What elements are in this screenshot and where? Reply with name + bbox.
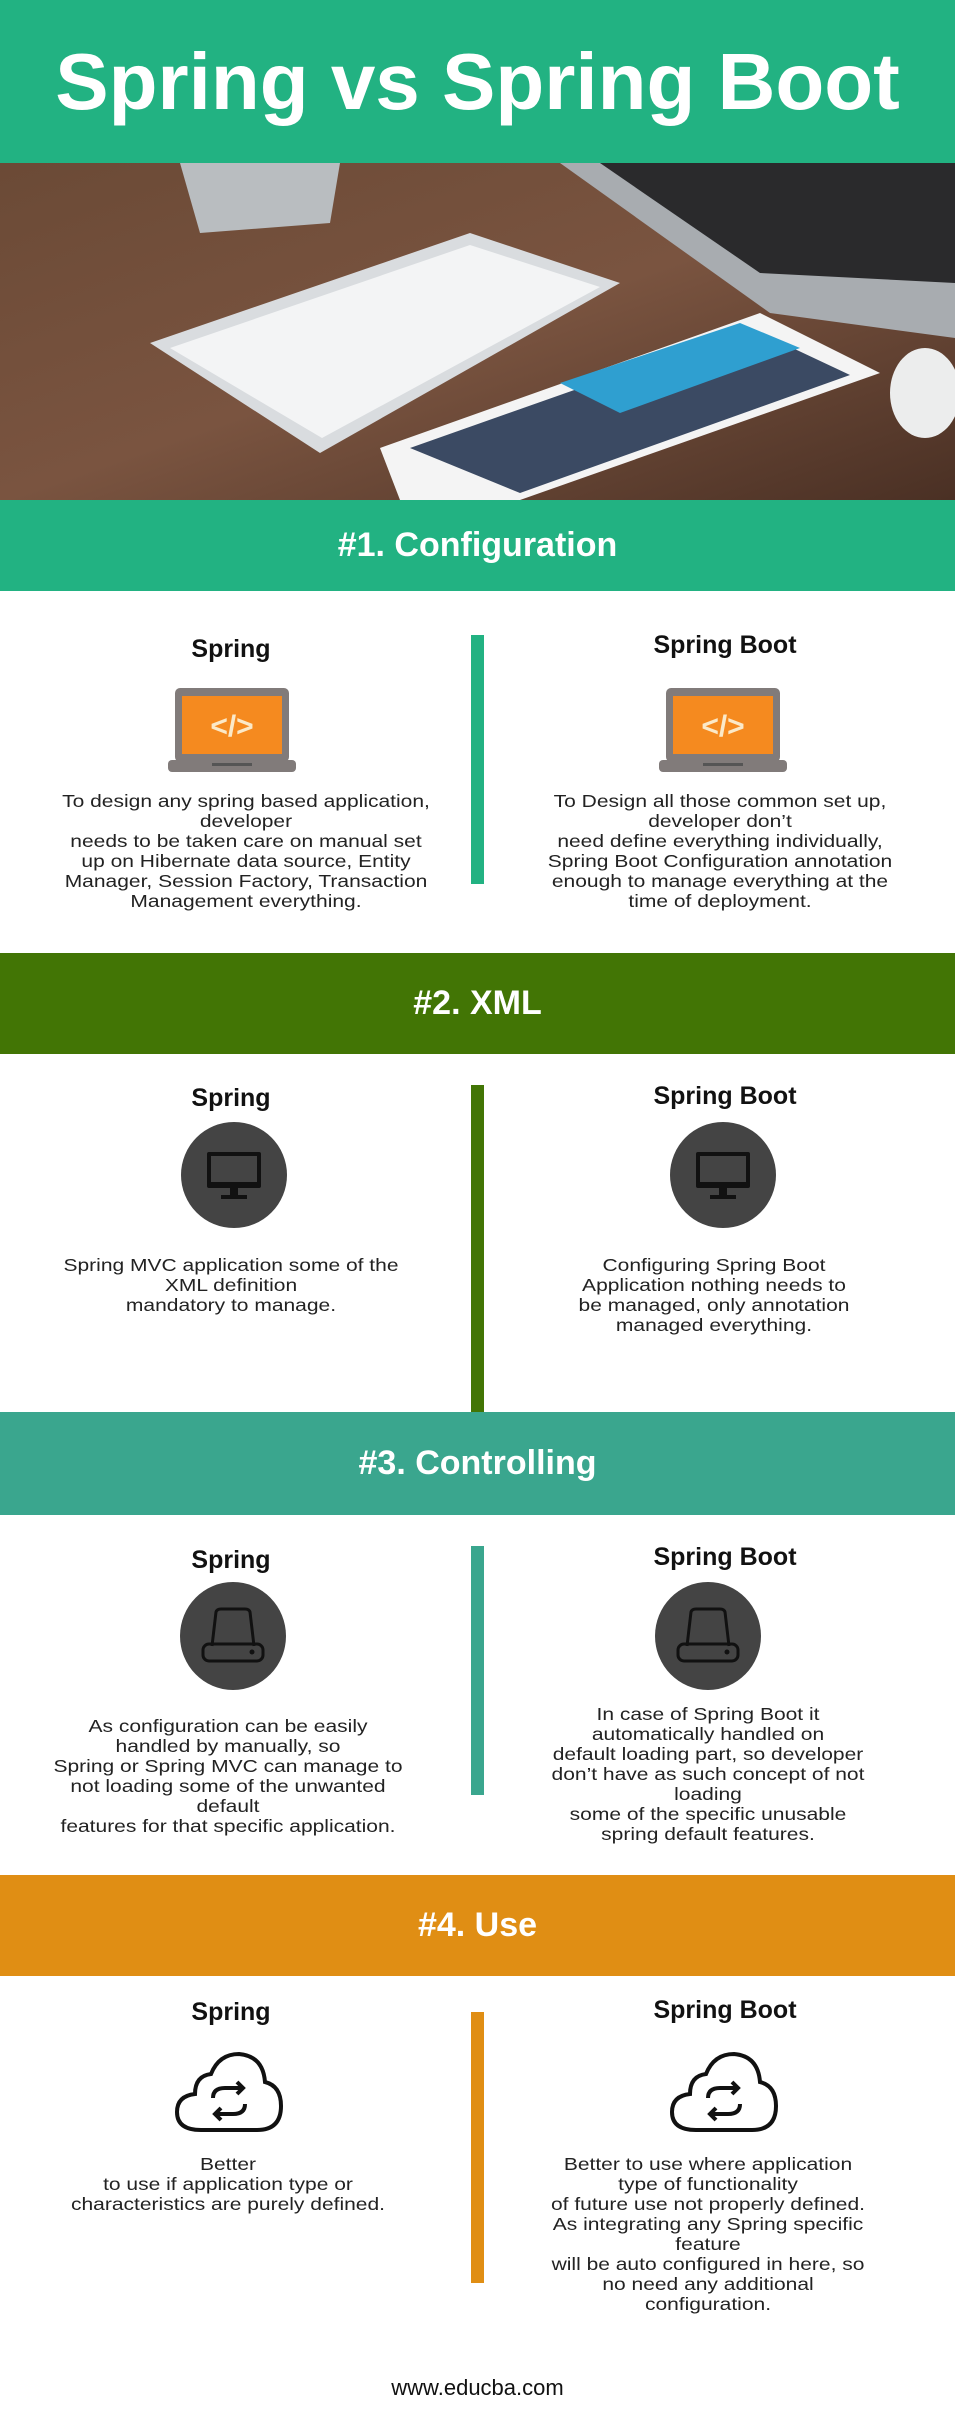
text: spring boot XML: managed everything. bbox=[616, 1315, 812, 1335]
text: spring boot XML bbox=[579, 1255, 849, 1335]
panel: use bbox=[71, 1996, 865, 2314]
title band: Spring vs Spring Boot bbox=[55, 36, 900, 126]
icon: monitor left bbox=[181, 1122, 287, 1228]
text: spring controlling: features for that specific application. bbox=[60, 1816, 396, 1836]
icon: laptop code left: </> bbox=[210, 710, 254, 743]
text: spring boot configuration: Spring Boot Configuration annotation bbox=[548, 851, 892, 871]
header: #2 XML bbox=[0, 953, 955, 1054]
panel: configuration bbox=[62, 631, 892, 911]
text: spring configuration: To design any spring based application, bbox=[62, 791, 430, 811]
text: spring configuration: up on Hibernate data source, Entity bbox=[81, 851, 411, 871]
text: spring controlling: default bbox=[196, 1796, 260, 1816]
text: spring boot controlling: default loading part, so developer bbox=[553, 1744, 863, 1764]
heading: Spring: Spring bbox=[191, 635, 271, 663]
header: #1 Configuration bbox=[0, 500, 955, 591]
text: spring boot XML: Application nothing needs to bbox=[582, 1275, 846, 1295]
heading: Spring: Spring bbox=[191, 1084, 271, 1112]
text: spring boot XML: be managed, only annotation bbox=[579, 1295, 849, 1315]
text: spring boot configuration: time of deployment. bbox=[628, 891, 812, 911]
text: spring boot controlling: some of the specific unusable bbox=[570, 1804, 846, 1824]
text: spring XML bbox=[63, 1255, 398, 1315]
icon: cloud sync left bbox=[175, 2052, 283, 2132]
text: spring controlling: not loading some of the unwanted bbox=[70, 1776, 386, 1796]
text: spring configuration: developer bbox=[200, 811, 292, 831]
text: spring XML: Spring MVC application some of the bbox=[63, 1255, 398, 1275]
icon: drive left bbox=[180, 1582, 286, 1690]
text: spring configuration: Manager, Session Factory, Transaction bbox=[65, 871, 427, 891]
text: spring boot use: of future use not properly defined. bbox=[551, 2194, 865, 2214]
text: spring boot use: As integrating any Spring specific bbox=[553, 2214, 863, 2234]
icon: laptop code left bbox=[168, 688, 296, 772]
divider bbox=[471, 635, 484, 884]
header: #4 Use bbox=[0, 1875, 955, 1976]
text: spring controlling: handled by manually, so bbox=[116, 1736, 340, 1756]
icon: drive right bbox=[655, 1582, 761, 1690]
header: #4 Use: #4. Use bbox=[418, 1906, 537, 1944]
heading: Spring Boot: Spring Boot bbox=[653, 631, 797, 659]
panel: XML bbox=[63, 1082, 849, 1412]
panel: controlling bbox=[53, 1543, 864, 1844]
text: spring XML: mandatory to manage. bbox=[126, 1295, 336, 1315]
header: #2 XML: #2. XML bbox=[413, 984, 542, 1022]
heading: Spring: Spring bbox=[191, 1998, 271, 2026]
divider bbox=[471, 2012, 484, 2283]
header: #3 Controlling bbox=[0, 1412, 955, 1515]
text: spring boot controlling: automatically handled on bbox=[592, 1724, 824, 1744]
text: spring boot use: feature bbox=[675, 2234, 741, 2254]
divider bbox=[471, 1546, 484, 1795]
text: spring controlling: Spring or Spring MVC can manage to bbox=[53, 1756, 403, 1776]
text: spring boot controlling: spring default features. bbox=[601, 1824, 815, 1844]
text: spring XML: XML definition bbox=[165, 1275, 297, 1295]
text: spring use: Better bbox=[200, 2154, 256, 2174]
footer: www.educba.com bbox=[391, 2375, 564, 2400]
heading: Spring Boot: Spring Boot bbox=[653, 1996, 797, 2024]
text: spring boot configuration: To Design all those common set up, bbox=[554, 791, 886, 811]
heading: Spring Boot: Spring Boot bbox=[653, 1543, 797, 1571]
text: spring use: to use if application type or bbox=[103, 2174, 353, 2194]
title band bbox=[0, 0, 955, 163]
text: spring boot controlling bbox=[552, 1704, 864, 1844]
text: spring boot controlling: loading bbox=[674, 1784, 742, 1804]
text: spring boot configuration: enough to manage everything at the bbox=[552, 871, 888, 891]
text: spring use: characteristics are purely defined. bbox=[71, 2194, 385, 2214]
icon: cloud sync right bbox=[670, 2052, 778, 2132]
text: spring configuration: Management everything. bbox=[130, 891, 362, 911]
header: #1 Configuration: #1. Configuration bbox=[338, 526, 617, 564]
icon: laptop code right: </> bbox=[701, 710, 745, 743]
photo: desk with keyboard, laptop and tablet bbox=[0, 163, 955, 500]
heading: Spring: Spring bbox=[191, 1546, 271, 1574]
text: spring boot use: will be auto configured in here, so bbox=[552, 2254, 864, 2274]
text: spring use bbox=[71, 2154, 385, 2214]
text: spring boot configuration: developer don’t bbox=[648, 811, 792, 831]
text: spring configuration bbox=[62, 791, 430, 911]
text: spring boot use: type of functionality bbox=[618, 2174, 798, 2194]
text: spring configuration: needs to be taken care on manual set bbox=[70, 831, 422, 851]
divider bbox=[471, 1085, 484, 1412]
heading: Spring Boot: Spring Boot bbox=[653, 1082, 797, 1110]
text: spring boot use: Better to use where application bbox=[564, 2154, 852, 2174]
text: spring boot XML: Configuring Spring Boot bbox=[603, 1255, 825, 1275]
header: #3 Controlling: #3. Controlling bbox=[358, 1444, 596, 1482]
text: spring boot controlling: In case of Spring Boot it bbox=[597, 1704, 819, 1724]
text: spring boot configuration: need define everything individually, bbox=[557, 831, 883, 851]
text: spring controlling: As configuration can be easily bbox=[89, 1716, 368, 1736]
text: spring boot use: configuration. bbox=[645, 2294, 771, 2314]
icon: monitor right bbox=[670, 1122, 776, 1228]
text: spring boot use bbox=[551, 2154, 865, 2314]
text: spring boot configuration bbox=[548, 791, 892, 911]
icon: laptop code right bbox=[659, 688, 787, 772]
text: spring boot use: no need any additional bbox=[602, 2274, 814, 2294]
text: spring controlling bbox=[53, 1716, 403, 1836]
text: spring boot controlling: don’t have as such concept of not bbox=[552, 1764, 864, 1784]
